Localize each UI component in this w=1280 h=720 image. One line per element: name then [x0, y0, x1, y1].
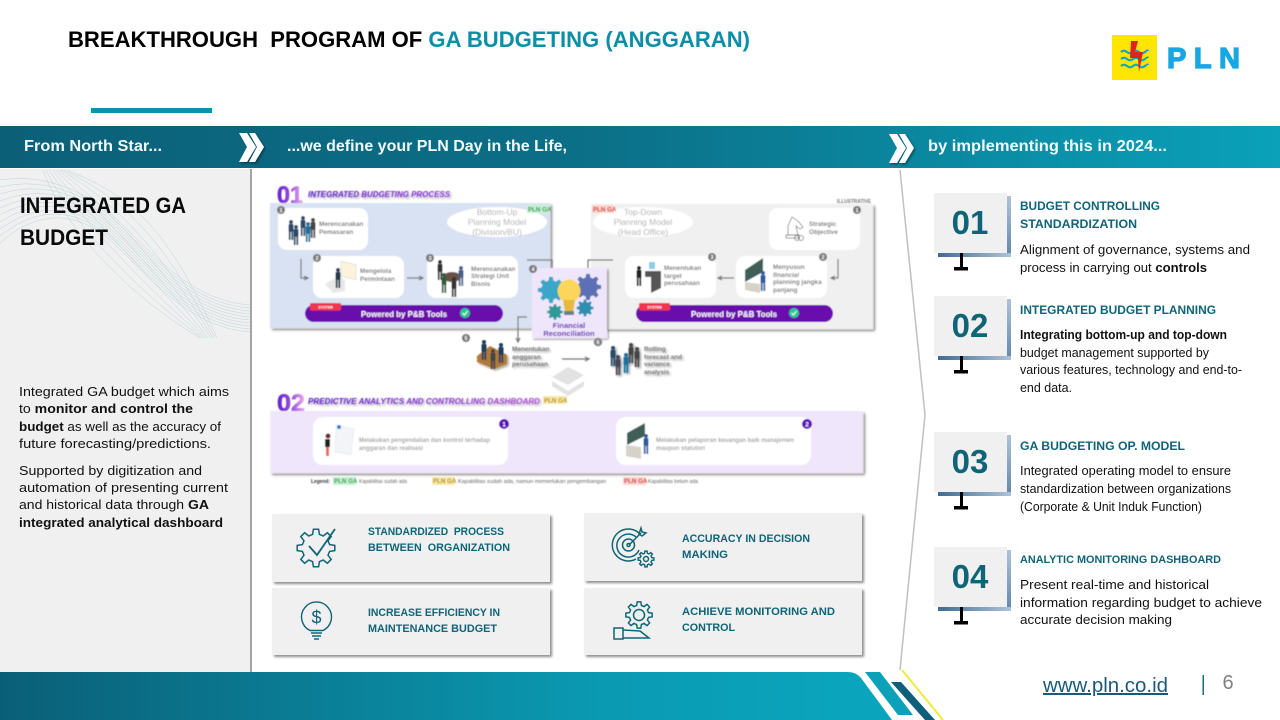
oval: top-down label: (Head Office) — [618, 227, 668, 237]
logo: PLN — [1112, 35, 1240, 80]
item 02: integrated budget planning: end data. — [1020, 380, 1072, 395]
logo: PLN: PLN — [1167, 43, 1240, 75]
item 03: GA budgeting op. model: Integrated operating model to ensure — [1020, 463, 1231, 478]
center pentagon panel — [900, 170, 925, 670]
card: Merencanakan Strategi Unit Bisnis: Bisnis — [471, 281, 491, 288]
left panel: integrated GA budget — [0, 169, 252, 672]
benefit card: achieve monitoring: ACHIEVE MONITORING AND — [682, 606, 835, 618]
panel description: integrated analytical dashboard — [19, 515, 223, 530]
panel description: to monitor and control the — [19, 401, 193, 416]
panel description: future forecasting/predictions. — [19, 436, 211, 451]
card: Menyusun financial planning: 2 — [821, 255, 825, 261]
item 01: budget controlling: Alignment of governance, systems and — [1020, 242, 1250, 257]
card: pelaporan: maupun statutori — [656, 445, 705, 452]
legend: PLN GA — [334, 478, 358, 485]
card: pengendalian: anggaran dan realisasi — [359, 445, 423, 452]
step: Rolling forecast — [594, 338, 682, 376]
illustrative label: ILLUSTRATIVE — [837, 199, 872, 205]
panel description: budget as well as the accuracy of — [19, 419, 221, 434]
card: Merencanakan Pemasaran: 1 — [279, 208, 283, 214]
card: Strategic Objective: Objective — [809, 229, 838, 236]
item 04: analytic monitoring dashboard: ANALYTIC MONITORING DASHBOARD — [1020, 554, 1221, 566]
section 02 heading: PREDICTIVE ANALYTICS AND CONTROLLING DASHBOARD — [308, 397, 540, 406]
oval: top-down label: Planning Model — [614, 217, 672, 227]
tag: PLN GA green: PLN GA — [528, 206, 552, 214]
legend: Legend: — [311, 479, 330, 485]
step: Rolling forecast: analysis — [644, 369, 670, 376]
card: pengendalian — [313, 417, 509, 465]
card: Menentukan target perusahaan — [625, 253, 716, 298]
card: pelaporan — [616, 417, 812, 465]
card: pengendalian: 1 — [502, 422, 506, 428]
card: Mengelola Permintaan — [313, 254, 404, 298]
card: Menyusun financial planning: Menyusun — [773, 264, 805, 271]
item 01: budget controlling — [934, 193, 1250, 275]
chevron 1 — [239, 133, 264, 162]
panel description: automation of presenting current — [19, 480, 228, 495]
item 03: GA budgeting op. model: (Corporate & Unit Induk Function) — [1020, 499, 1202, 514]
footer band — [0, 670, 943, 720]
card: Menentukan target perusahaan: 3 — [710, 255, 714, 261]
legend: PLN GA — [433, 478, 457, 485]
item 04: analytic monitoring dashboard — [934, 547, 1262, 627]
item 02: integrated budget planning: various features, technology and end-to- — [1020, 362, 1242, 377]
oval: bottom-up label — [447, 207, 547, 237]
legend: Kapabilitas belum ada — [648, 479, 698, 485]
item 04: analytic monitoring dashboard: accurate decision making — [1020, 612, 1172, 627]
box: financial reconciliation: Reconciliation — [543, 329, 595, 338]
card: pelaporan: 2 — [805, 422, 809, 428]
card: pengendalian: Melakukan pengendalian dan kontrol terhadap — [359, 437, 490, 444]
card: Merencanakan Strategi Unit Bisnis: Merencanakan — [471, 266, 515, 273]
arrow: budget to forecast — [562, 357, 589, 361]
item 01: budget controlling: 01 — [952, 204, 988, 241]
panel description: and historical data through GA — [19, 497, 210, 512]
band label 3: by implementing this in 2024... — [928, 138, 1167, 155]
card: Merencanakan Strategi Unit Bisnis: 3 — [428, 256, 432, 262]
box: financial reconciliation — [529, 265, 607, 338]
box: financial reconciliation: 4 — [531, 267, 535, 273]
panel heading — [20, 193, 186, 250]
card: Mengelola Permintaan: Permintaan — [360, 276, 395, 283]
card: Menentukan target perusahaan: perusahaan — [664, 280, 700, 287]
section 02 heading: PLN GA — [544, 398, 568, 404]
process diagram image area — [270, 182, 873, 485]
card: Menentukan target perusahaan: target — [664, 273, 683, 280]
step: Menentukan anggaran perusahaan: perusahaan — [512, 361, 548, 368]
section 02 heading: 02 — [277, 390, 305, 417]
card: Menyusun financial planning: panjang — [773, 287, 798, 294]
system bar: Powered by P&B Tools — [305, 303, 503, 322]
tag: PLN GA red: PLN GA — [593, 206, 617, 214]
section 02 heading — [277, 390, 568, 417]
legend: PLN GA — [624, 478, 648, 485]
step: Menentukan anggaran perusahaan: Menentukan — [512, 346, 549, 353]
item 02: integrated budget planning: budget management supported by — [1020, 345, 1209, 360]
card: Merencanakan Pemasaran: Pemasaran — [319, 229, 353, 236]
system bar: Powered by P&B Tools: Powered by P&B Tools — [691, 309, 777, 319]
item 03: GA budgeting op. model: GA BUDGETING OP. MODEL — [1020, 439, 1185, 453]
item 02: integrated budget planning — [934, 296, 1242, 395]
panel: predictive analytics — [270, 411, 863, 473]
item 01: budget controlling: process in carrying out controls — [1020, 260, 1207, 275]
item 04: analytic monitoring dashboard: information regarding budget to achieve — [1020, 595, 1262, 610]
legend: Kapabilitas sudah ada — [359, 479, 407, 485]
benefit card: accuracy in decision making: MAKING — [682, 549, 728, 561]
item 03: GA budgeting op. model: 03 — [952, 443, 988, 480]
band label 2: ...we define your PLN Day in the Life, — [287, 138, 567, 155]
header band — [0, 126, 1280, 168]
band label 1: From North Star... — [24, 138, 162, 155]
panel: top-down planning — [588, 199, 873, 329]
section 01 heading — [277, 182, 451, 209]
system bar: Powered by P&B Tools — [636, 303, 833, 322]
oval: bottom-up label: Planning Model — [468, 217, 526, 227]
title: BREAKTHROUGH PROGRAM OF GA BUDGETING (ANGGARAN) — [68, 27, 750, 52]
system bar: Powered by P&B Tools: Powered by P&B Tools — [361, 309, 447, 319]
benefit card: standardized process: BETWEEN ORGANIZATION — [368, 542, 510, 554]
step: Menentukan anggaran perusahaan: 5 — [464, 336, 468, 342]
system bar: Powered by P&B Tools: SYSTEM — [318, 306, 333, 310]
section 01 heading: 01 — [277, 182, 303, 209]
panel description: Supported by digitization and — [19, 463, 202, 478]
arrow: top-down to reconciliation — [588, 260, 613, 268]
step: Rolling forecast: forecast and — [644, 354, 682, 361]
arrow: step 1 to 2 — [301, 259, 308, 280]
arrow: reconciliation to budget — [516, 317, 527, 342]
oval: bottom-up label: Bottom-Up — [477, 207, 518, 217]
legend — [311, 477, 698, 485]
item 03: GA budgeting op. model — [934, 432, 1231, 514]
oval: bottom-up label: (Division/BU) — [472, 227, 522, 237]
footer separator and page number — [1202, 672, 1234, 695]
section 01 heading: INTEGRATED BUDGETING PROCESS — [308, 190, 451, 199]
panel heading: INTEGRATED GA — [20, 193, 186, 218]
icon: gear over hand — [614, 602, 652, 639]
benefit card: standardized process — [272, 514, 550, 582]
card: Strategic Objective: Strategic — [809, 221, 837, 228]
card: Merencanakan Strategi Unit Bisnis — [426, 254, 518, 298]
arrow: bottom-up to reconciliation — [527, 260, 552, 268]
benefit card: accuracy in decision making: ACCURACY IN DECISION — [682, 533, 810, 545]
step: Menentukan anggaran perusahaan — [462, 334, 549, 369]
item 02: integrated budget planning: Integrating bottom-up and top-down — [1020, 327, 1227, 342]
card: Strategic Objective: 1 — [855, 208, 859, 214]
card: Merencanakan Pemasaran — [277, 206, 368, 250]
item 04: analytic monitoring dashboard: Present real-time and historical — [1020, 577, 1209, 592]
card: Menyusun financial planning: planning jangka — [773, 279, 822, 286]
accent bar under title — [91, 108, 212, 113]
stacked chevrons — [552, 367, 584, 396]
item 03: GA budgeting op. model: standardization between organizations — [1020, 481, 1231, 496]
icon: dollar bulb — [302, 602, 332, 639]
footer separator and page number: 6 — [1222, 672, 1234, 694]
card: Merencanakan Pemasaran: Merencanakan — [319, 221, 363, 228]
benefit card: achieve monitoring — [584, 588, 862, 655]
card: Menyusun financial planning: financial — [773, 272, 799, 279]
icon: gear with check — [297, 529, 335, 567]
wave pattern — [0, 170, 250, 338]
card: Merencanakan Strategi Unit Bisnis: Strategi Unit — [471, 273, 510, 280]
item 02: integrated budget planning: 02 — [952, 307, 988, 344]
card: Menentukan target perusahaan: Menentukan — [664, 265, 701, 272]
benefit card: accuracy in decision making — [584, 513, 862, 581]
card: Menyusun financial planning — [736, 253, 827, 298]
step: Menentukan anggaran perusahaan: anggaran — [512, 354, 541, 361]
benefit card: increase efficiency — [272, 588, 550, 655]
footer website link: www.pln.co.id — [1042, 675, 1168, 697]
icon: target with gear — [612, 528, 654, 567]
card: Strategic Objective — [769, 206, 861, 250]
step: Rolling forecast: 6 — [596, 340, 600, 346]
panel: bottom-up planning — [270, 203, 552, 328]
panel description: Integrated GA budget which aims — [19, 384, 230, 399]
icon: dollar bulb: $ — [311, 608, 322, 628]
benefit card: achieve monitoring: CONTROL — [682, 622, 735, 634]
card: Mengelola Permintaan: 2 — [315, 256, 319, 262]
card: Mengelola Permintaan: Mengelola — [360, 268, 392, 275]
oval: top-down label — [593, 207, 693, 237]
benefit card: increase efficiency: INCREASE EFFICIENCY IN — [368, 607, 500, 619]
benefit card: increase efficiency: MAINTENANCE BUDGET — [368, 623, 497, 635]
item 02: integrated budget planning: INTEGRATED BUDGET PLANNING — [1020, 303, 1216, 317]
chevron 2 — [889, 134, 914, 163]
card: pelaporan: Melakukan pelaporan keuangan baik manajemen — [656, 437, 794, 444]
panel heading: BUDGET — [20, 225, 109, 250]
step: Rolling forecast: variance — [644, 361, 670, 368]
arrow: step 2 to 3 — [407, 276, 423, 280]
arrow: top-down step 1 to 2 — [831, 259, 838, 280]
item 04: analytic monitoring dashboard: 04 — [952, 558, 989, 595]
benefit card: standardized process: STANDARDIZED PROCESS — [368, 526, 504, 538]
item 01: budget controlling: STANDARDIZATION — [1020, 217, 1137, 231]
step: Rolling forecast: Rolling — [644, 346, 666, 353]
oval: top-down label: Top-Down — [624, 207, 662, 217]
system bar: Powered by P&B Tools: SYSTEM — [647, 306, 662, 310]
legend: Kapabilitas sudah ada, namun memerlukan pengembangan — [458, 479, 606, 485]
item 01: budget controlling: BUDGET CONTROLLING — [1020, 199, 1160, 213]
arrow: top-down step 2 to 3 — [718, 276, 734, 280]
box: financial reconciliation: Financial — [553, 321, 585, 330]
panel description — [19, 384, 230, 530]
